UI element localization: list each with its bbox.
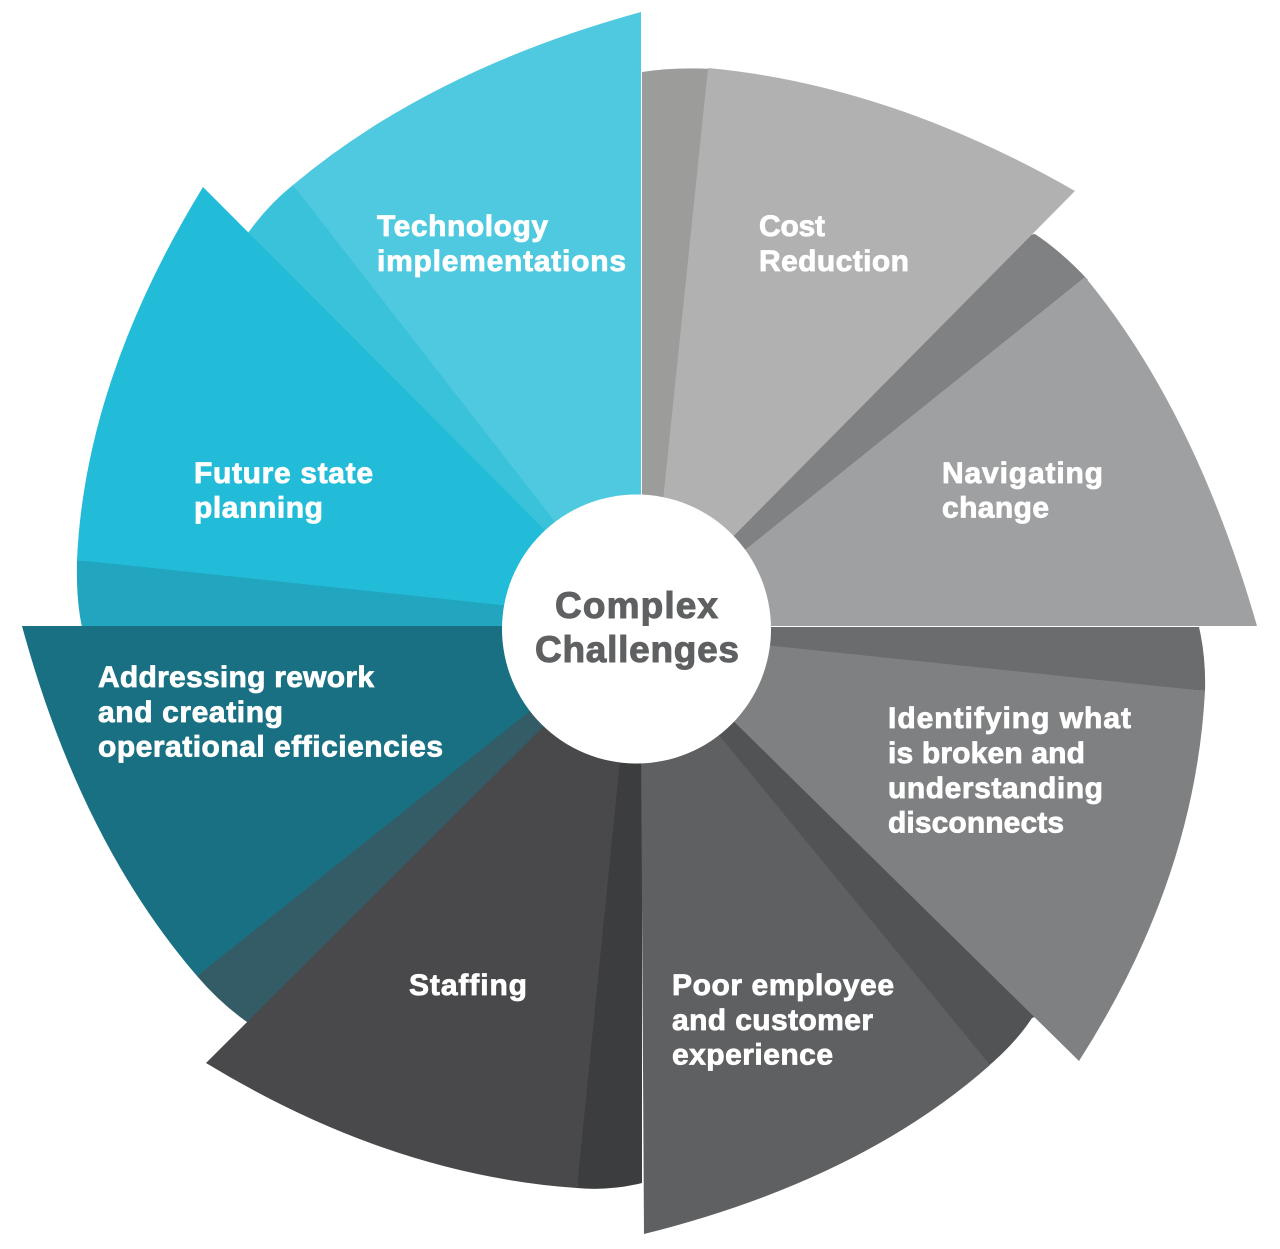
label: navigating change: change: [942, 492, 1049, 524]
label: poor employee experience: and customer: [672, 1004, 873, 1037]
label: addressing rework: and creating: [98, 696, 283, 729]
label: poor employee experience: [672, 969, 894, 1072]
segment: identifying what is broken: [712, 627, 1205, 1061]
label: addressing rework: Addressing rework: [98, 661, 374, 694]
label: addressing rework: [98, 661, 443, 764]
label: identifying what is broken: is broken and: [888, 737, 1085, 770]
center circle: [502, 494, 771, 764]
label: cost reduction: Cost: [759, 210, 825, 243]
segment: future state planning: [77, 187, 580, 627]
center title: Challenges: [535, 629, 739, 670]
label: future state planning: [194, 457, 373, 524]
label: navigating change: [942, 457, 1103, 524]
segment: addressing rework: [22, 626, 600, 1022]
label: poor employee experience: experience: [672, 1038, 833, 1072]
label: technology implementations: [377, 210, 626, 278]
label: technology implementations: Technology: [377, 210, 548, 243]
label: poor employee experience: Poor employee: [672, 969, 894, 1002]
segment: staffing: [206, 710, 642, 1189]
label: identifying what is broken: disconnects: [888, 806, 1064, 840]
label: identifying what is broken: [888, 702, 1131, 840]
label: future state planning: planning: [194, 492, 323, 524]
label: future state planning: Future state: [194, 457, 373, 490]
center title: [535, 585, 739, 670]
label: identifying what is broken: understanding: [888, 772, 1103, 805]
label: addressing rework: operational efficiencies: [98, 730, 443, 764]
label: cost reduction: [759, 210, 909, 278]
segment: navigating change: [690, 234, 1257, 626]
segment: technology implementations: [248, 12, 641, 560]
label: staffing: Staffing: [409, 969, 527, 1002]
segment: poor employee experience: [641, 690, 1040, 1234]
label: technology implementations: implementations: [377, 245, 626, 278]
label: cost reduction: Reduction: [759, 245, 909, 278]
center title: Complex: [555, 585, 718, 626]
segment: cost reduction: [642, 68, 1075, 565]
label: navigating change: Navigating: [942, 457, 1103, 490]
label: identifying what is broken: Identifying what: [888, 702, 1131, 735]
